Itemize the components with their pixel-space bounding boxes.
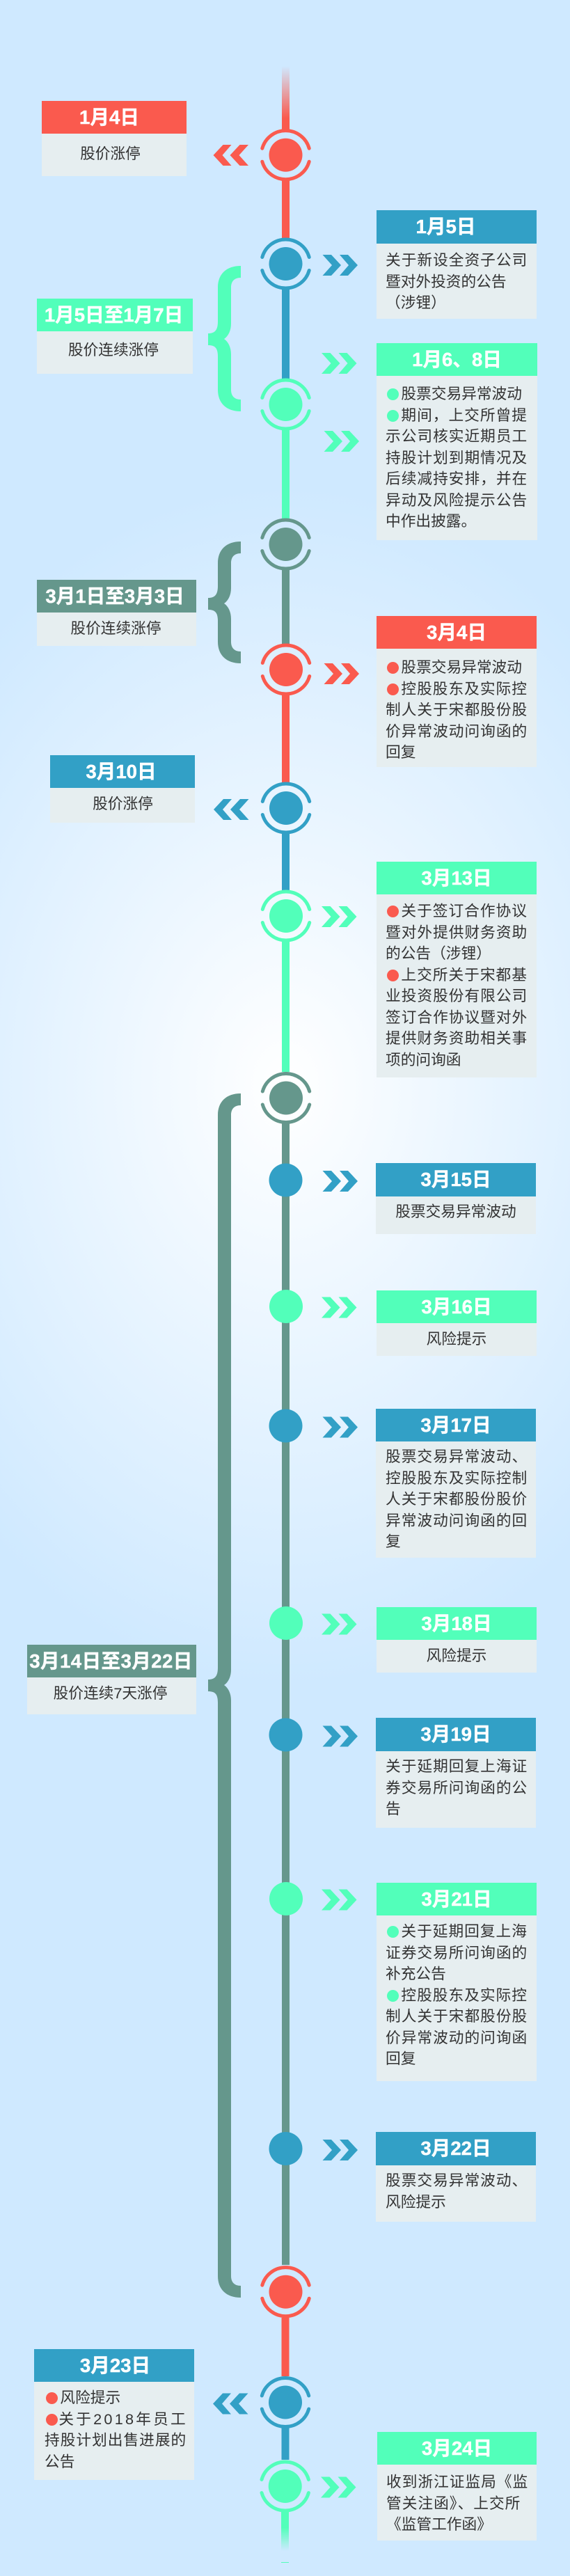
panel: 3月4日: 制人关于宋都股份股 (386, 701, 528, 718)
panel: 3月10日 (50, 755, 195, 823)
arrow right: 1月5日 (323, 255, 358, 276)
panel: 3月4日: 3月4日 (427, 622, 486, 643)
panel: 3月4日: 控股股东及实际控 (401, 679, 528, 697)
panel: 3月22日: 股票交易异常波动、 (386, 2172, 528, 2189)
panel: 3月19日: 告 (386, 1800, 401, 1817)
panel: 3月1日至3月3日: 股价连续涨停 (70, 619, 161, 637)
panel: 3月15日: 股票交易异常波动 (395, 1203, 516, 1220)
panel: 3月21日: 3月21日 (421, 1888, 492, 1910)
panel: 3月21日: 控股股东及实际控 (401, 1986, 528, 2003)
arrow right: 3月4日 (324, 663, 359, 684)
panel: 3月24日 (377, 2432, 537, 2541)
panel: 3月22日: 风险提示 (386, 2192, 446, 2211)
panel: 3月14日至3月22日 (27, 1645, 196, 1714)
panel: 3月23日 (34, 2349, 194, 2480)
panel: 3月4日: 回复 (386, 743, 415, 761)
panel: 3月14日至3月22日: 3月14日至3月22日 (29, 1650, 193, 1672)
panel: 1月5日至1月7日 (37, 299, 193, 374)
node: 1月4日 (262, 131, 309, 180)
arrow right: 1月6日 (322, 353, 356, 374)
node: 3月14日 (262, 1073, 310, 1123)
panel: 3月23日: 持股计划出售进展的 (45, 2431, 187, 2449)
panel: 3月19日 (376, 1718, 536, 1828)
node: 1月5日 (262, 239, 309, 288)
node: 3月13日 (262, 892, 310, 940)
panel: 3月16日 (377, 1290, 537, 1356)
panel: 3月21日: 关于延期回复上海 (401, 1922, 528, 1940)
arrow right: 3月15日 (323, 1171, 358, 1192)
panel: 3月16日: 3月16日 (421, 1296, 492, 1318)
panel: 3月4日 (377, 616, 537, 767)
panel: 3月18日: 3月18日 (421, 1613, 492, 1634)
panel: 3月13日: 签订合作协议暨对外 (386, 1008, 528, 1026)
panel: 3月19日: 券交易所问询函的公 (386, 1779, 528, 1796)
panel: 1月5日: 暨对外投资的公告 (386, 273, 507, 290)
arrow right: 3月19日 (323, 1726, 358, 1747)
panel: 3月22日: 3月22日 (420, 2138, 491, 2159)
node: 3月23日 (262, 2378, 309, 2427)
panel: 3月21日: 回复 (386, 2050, 415, 2067)
node: 3月22日收盘 (262, 2268, 309, 2316)
panel: 3月13日: 3月13日 (421, 867, 492, 889)
dot: 3月18日 (269, 1606, 303, 1640)
panel: 3月13日: 关于签订合作协议 (401, 902, 528, 919)
arrow right: 3月17日 (323, 1417, 358, 1438)
arrow right: 3月18日 (322, 1613, 356, 1634)
panel: 3月17日: 异常波动问询函的回 (386, 1512, 528, 1528)
panel: 3月24日: 管关注函》、上交所 (386, 2495, 521, 2511)
panel: 3月14日至3月22日: 股价连续7天涨停 (54, 1684, 167, 1702)
node: 3月1日 (262, 520, 309, 569)
panel: 3月10日: 股价涨停 (93, 795, 153, 812)
panel: 1月6、8日: 中作出披露。 (386, 512, 476, 530)
panel: 3月17日: 人关于宋都股份股价 (386, 1490, 528, 1508)
arrow right: 3月13日 (322, 906, 356, 927)
brace: 1月5日至1月7日 (208, 266, 241, 411)
node: 3月24日 (262, 2462, 308, 2511)
panel: 3月18日 (377, 1607, 537, 1673)
panel: 3月24日: 《监管工作函》 (386, 2515, 492, 2533)
panel: 3月23日: 风险提示 (60, 2389, 120, 2406)
panel: 3月13日: 项的问询函 (386, 1051, 461, 1068)
panel: 3月21日: 补充公告 (386, 1965, 446, 1982)
panel: 3月17日: 3月17日 (420, 1414, 491, 1436)
node: 3月10日 (262, 784, 310, 832)
panel: 3月13日: 业投资股份有限公司 (386, 987, 528, 1004)
panel: 3月1日至3月3日 (37, 580, 196, 646)
panel: 3月17日: 复 (386, 1533, 401, 1550)
panel: 1月5日: 关于新设全资子公司 (386, 251, 528, 269)
node: 3月4日 (262, 645, 310, 694)
panel: 1月5日: 1月5日 (416, 216, 475, 237)
panel: 3月1日至3月3日: 3月1日至3月3日 (45, 585, 184, 607)
panel: 3月17日 (376, 1409, 536, 1558)
panel: 1月6、8日: 持股计划到期情况及 (386, 448, 528, 466)
panel: 1月5日 (377, 210, 537, 319)
dot: 3月17日 (269, 1409, 302, 1442)
panel: 3月15日: 3月15日 (420, 1169, 491, 1190)
panel: 1月6、8日: 股票交易异常波动 (401, 385, 522, 402)
panel: 3月21日: 制人关于宋都股份股 (386, 2007, 528, 2025)
panel: 1月6、8日: 后续减持安排，并在 (386, 470, 528, 487)
panel: 3月19日: 3月19日 (420, 1723, 491, 1745)
panel: 3月23日: 关于2018年员工 (58, 2410, 188, 2428)
panel: 3月21日 (377, 1883, 537, 2081)
panel: 1月4日: 股价涨停 (80, 145, 141, 162)
panel: 3月17日: 控股股东及实际控制 (386, 1469, 528, 1487)
panel: 1月5日: （涉锂） (386, 294, 446, 311)
panel: 3月13日: 提供财务资助相关事 (386, 1029, 528, 1047)
panel: 3月15日 (376, 1163, 536, 1234)
arrow left: 3月23日 (213, 2393, 248, 2414)
panel: 3月17日: 股票交易异常波动、 (386, 1448, 528, 1465)
arrow right: 3月16日 (322, 1297, 356, 1318)
panel: 3月13日: 暨对外提供财务资助 (386, 923, 528, 941)
panel: 3月24日: 3月24日 (422, 2437, 492, 2459)
panel: 1月4日 (42, 101, 187, 176)
dot: 3月19日 (269, 1718, 302, 1751)
timeline vertical line (281, 66, 290, 2563)
panel: 3月16日: 风险提示 (427, 1330, 486, 1348)
panel: 3月4日: 股票交易异常波动 (401, 658, 522, 676)
panel: 3月22日 (376, 2132, 536, 2222)
arrow right: 1月8日 (324, 431, 359, 452)
panel: 3月23日: 公告 (45, 2453, 74, 2470)
dot: 3月16日 (269, 1290, 303, 1323)
panel: 1月5日至1月7日: 股价连续涨停 (68, 341, 159, 358)
panel: 1月6、8日: 异动及风险提示公告 (386, 491, 528, 508)
panel: 3月21日: 证券交易所问询函的 (386, 1943, 528, 1961)
panel: 3月18日: 风险提示 (427, 1647, 486, 1664)
panel: 3月4日: 价异常波动问询函的 (386, 722, 528, 739)
arrow right: 3月21日 (322, 1889, 356, 1910)
panel: 1月6、8日: 期间，上交所曾提 (401, 406, 528, 423)
panel: 3月13日: 上交所关于宋都基 (401, 966, 528, 983)
panel: 1月6、8日: 示公司核实近期员工 (386, 427, 528, 445)
panel: 3月23日: 3月23日 (80, 2355, 150, 2376)
panel: 3月19日: 关于延期回复上海证 (386, 1757, 528, 1775)
panel: 1月5日至1月7日: 1月5日至1月7日 (45, 304, 183, 326)
dot: 3月15日 (269, 1164, 302, 1197)
arrow left: 1月4日 (213, 145, 248, 166)
panel: 3月21日: 价异常波动的问询函 (386, 2028, 528, 2046)
brace: 3月1日至3月3日 (208, 542, 241, 663)
brace: 3月14日至3月22日 (208, 1093, 241, 2298)
panel: 1月4日: 1月4日 (79, 106, 139, 128)
arrow left: 3月10日 (214, 799, 249, 820)
panel: 3月13日 (377, 862, 537, 1077)
dot: 3月21日 (269, 1882, 303, 1915)
dot: 3月22日 (269, 2132, 302, 2165)
arrow right: 3月24日 (321, 2476, 356, 2497)
panel: 3月24日: 收到浙江证监局《监 (386, 2473, 528, 2490)
node: 1月6、8日 (262, 380, 309, 429)
panel: 1月6、8日: 1月6、8日 (412, 349, 502, 370)
panel: 3月10日: 3月10日 (86, 761, 157, 782)
arrow right: 3月22日 (323, 2140, 358, 2160)
panel: 3月13日: 的公告（涉锂） (386, 945, 491, 962)
panel: 1月6、8日 (377, 343, 537, 540)
